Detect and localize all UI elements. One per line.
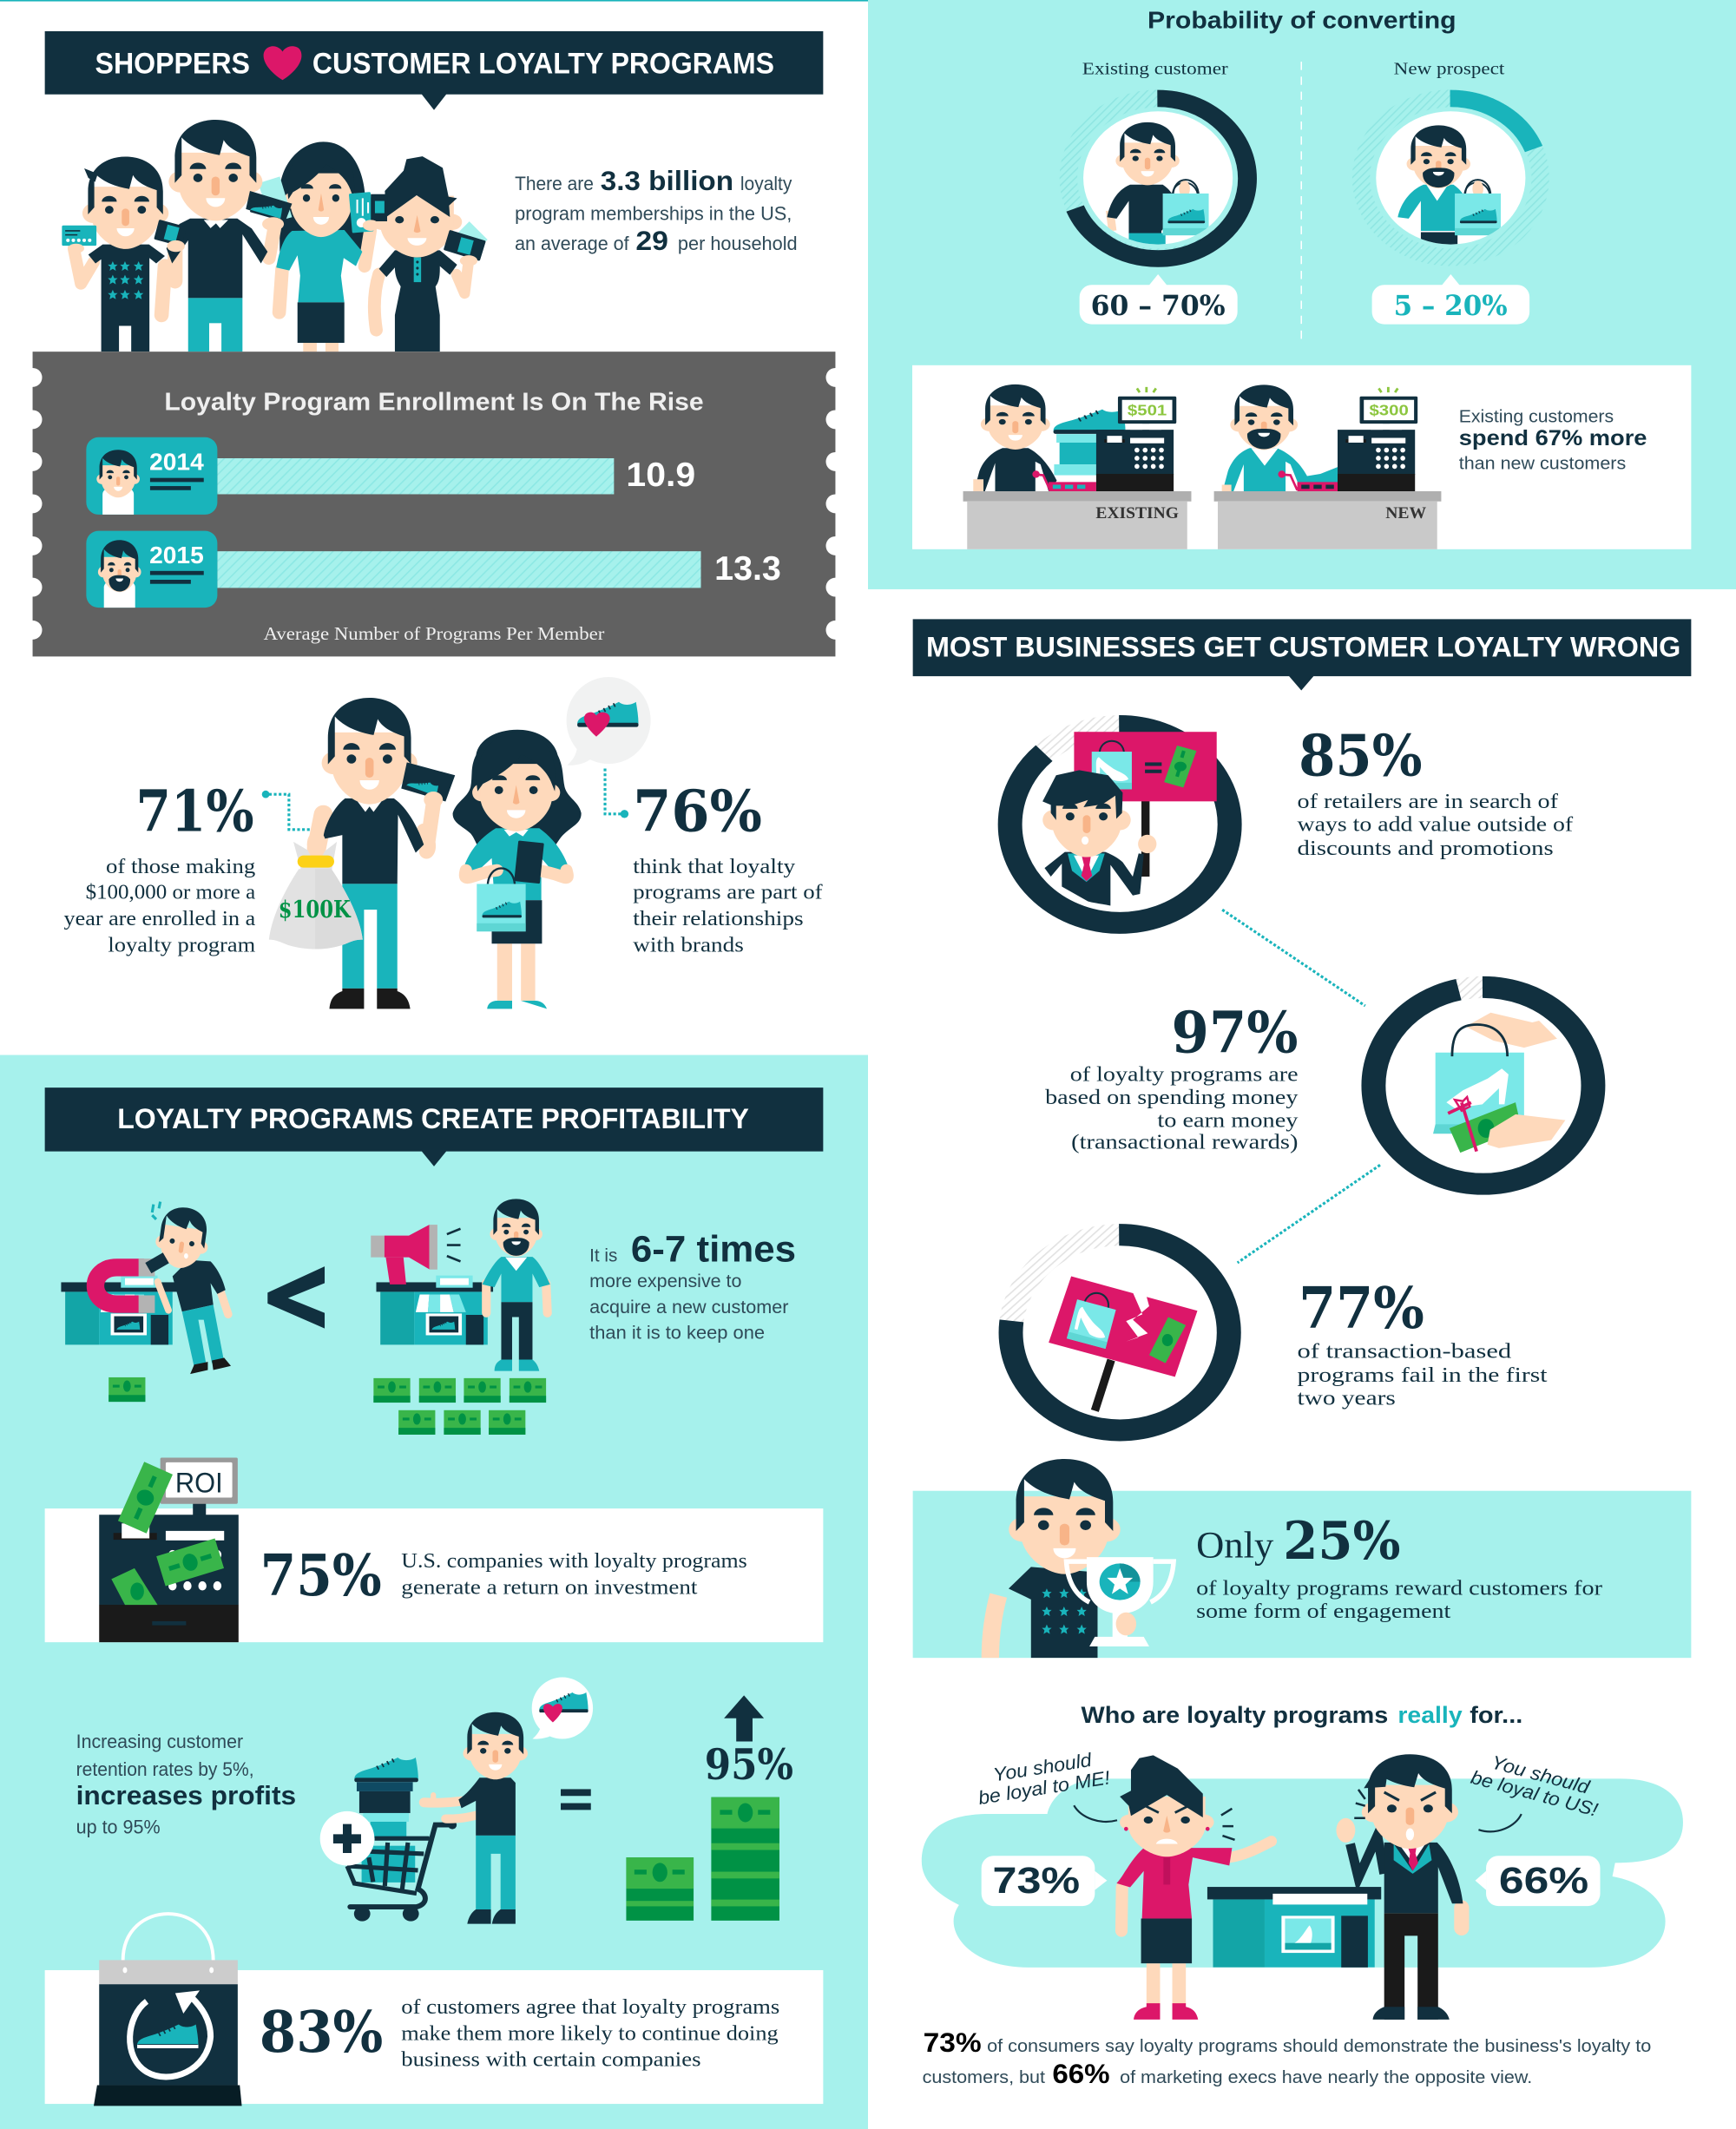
- quote: you should be loyal to us: You should: [1489, 1751, 1593, 1798]
- less than symbol: [267, 1266, 325, 1329]
- panel: only 25%: [913, 1459, 1691, 1658]
- prospect with bag: [1397, 125, 1501, 248]
- illustration: retention store with magnet: [61, 1202, 231, 1374]
- text: spend 67% more: [1459, 408, 1647, 474]
- stat: 77%: 77%: [1299, 1275, 1424, 1342]
- stat: 77%: [1298, 1275, 1548, 1409]
- top accent line: [0, 0, 868, 2]
- counter: new customer: NEW: [1385, 504, 1426, 522]
- bar: 2015: 13.3: [714, 550, 781, 588]
- chart: new prospect donut: New prospect: [1394, 59, 1505, 78]
- icon: money bag: [269, 831, 363, 950]
- text: 73% and 66% summary: 66%: [1052, 2059, 1110, 2089]
- text: 3.3 billion memberships: There are: [515, 173, 594, 194]
- bar: 2014: [86, 437, 695, 515]
- stat: 71%: of those making: [106, 855, 255, 878]
- quote: you should be loyal to me: [976, 1749, 1117, 1822]
- chart heading: Loyalty Program Enrollment Is On The Rise: [164, 388, 704, 416]
- chart: existing customer donut: [1069, 59, 1247, 325]
- stat: 97%: based on spending money: [1045, 1087, 1298, 1109]
- chart: 85% ring with sign: [1010, 726, 1230, 923]
- heading: loyalty programs create profitability: [45, 1087, 823, 1166]
- title banner: [45, 31, 823, 110]
- panel: 83% continue doing business: [45, 1914, 823, 2106]
- pill: 73%: 73%: [993, 1860, 1080, 1901]
- value pill: [1080, 274, 1238, 325]
- icon: money bag: $100K: [279, 896, 352, 923]
- icon: shopping bag with refresh arrow: [94, 1914, 242, 2106]
- icon: ROI cash register: [99, 1458, 239, 1642]
- stat: 71%: year are enrolled in a: [64, 907, 255, 930]
- value pill: 5 – 20%: [1394, 289, 1508, 322]
- one bill: cost to retain: [108, 1377, 145, 1402]
- hand: bottom: [1488, 1114, 1565, 1148]
- text: spend 67% more: Existing customers: [1459, 408, 1614, 427]
- chart: 77% ring with broken sign: [1011, 1235, 1229, 1430]
- panel: 75% ROI: generate a return on investment: [401, 1576, 698, 1600]
- heading: probability of converting: Probability of converting: [1147, 6, 1457, 33]
- text: 73% and 66% summary: 73%: [924, 2027, 982, 2058]
- text: 6-7 times: more expensive to: [589, 1271, 742, 1291]
- counter: new customer: [1214, 384, 1441, 549]
- chart: 97% ring with bag and hands: [1373, 987, 1593, 1184]
- panel: only 25%: Only: [1196, 1524, 1273, 1566]
- tall stack: [711, 1797, 779, 1921]
- text: 3.3 billion memberships: an average of: [515, 233, 629, 254]
- seven bills: cost to acquire: [373, 1378, 546, 1435]
- icon: ROI cash register: ROI: [175, 1466, 223, 1498]
- bar: 2015: 2015: [149, 542, 204, 568]
- heading: loyalty programs create profitability: LOYALTY PROGRAMS CREATE PROFITABILITY: [117, 1102, 749, 1134]
- heading: who are loyalty programs really for: really: [1397, 1702, 1463, 1728]
- connector: bubble to 76%: [605, 768, 628, 818]
- panel: probability background: [868, 0, 1736, 589]
- text: 73% and 66% summary: of marketing execs have nearly the opposite view.: [1120, 2067, 1532, 2087]
- woman in teal top: [276, 141, 387, 352]
- panel: 83% continue doing business: make them more likely to continue doing: [401, 2021, 779, 2045]
- text: spend 67% more: spend 67% more: [1459, 426, 1647, 450]
- customer with bag: [1107, 122, 1209, 249]
- text: spend 67% more: than new customers: [1459, 455, 1626, 474]
- panel: 83% continue doing business: 83%: [260, 1999, 383, 2066]
- man pushing cart: [424, 1712, 528, 1924]
- stat: 76%: their relationships: [633, 907, 804, 930]
- small stack: [626, 1857, 694, 1921]
- stat: 77%: two years: [1298, 1387, 1396, 1409]
- tall man with teal trousers: [167, 120, 292, 352]
- text: 3.3 billion memberships: 3.3 billion: [601, 166, 733, 196]
- icon: heart: [264, 46, 301, 80]
- text: 6-7 times: than it is to keep one: [589, 1323, 765, 1344]
- shopping cart pink: [1032, 470, 1096, 491]
- title banner: SHOPPERS: [95, 47, 250, 80]
- heading: most businesses get customer loyalty wrong: MOST BUSINESSES GET CUSTOMER LOYALTY WRONG: [926, 631, 1680, 662]
- stat: 85%: 85%: [1299, 722, 1422, 789]
- illustration: woman with shopping bag: [453, 677, 651, 1009]
- text: 3.3 billion memberships: loyalty: [740, 173, 792, 194]
- stat: 85%: [1298, 722, 1573, 860]
- woman: customer: [1116, 1755, 1272, 2020]
- stat: 97%: (transactional rewards): [1071, 1131, 1298, 1153]
- text: 3.3 billion memberships: [515, 166, 798, 256]
- illustration: shopper with cart: [320, 1678, 593, 1924]
- speech bubble: shoe and heart: [567, 677, 651, 766]
- shopping cart pink: [1278, 470, 1338, 491]
- value pill: 60 – 70%: [1091, 289, 1226, 322]
- quote: you should be loyal to us: [1469, 1751, 1601, 1831]
- stat: 76%: [633, 778, 824, 957]
- text: increases profits: retention rates by 5%,: [76, 1758, 254, 1780]
- panel: 83% continue doing business: of customers agree that loyalty programs: [401, 1995, 779, 2019]
- panel: 83% continue doing business: business with certain companies: [401, 2048, 701, 2072]
- text: increases profits: increases profits: [76, 1781, 296, 1810]
- stat: 71%: loyalty program: [108, 934, 255, 957]
- stat: 76%: programs are part of: [633, 881, 824, 904]
- shopping cart: [347, 1821, 457, 1922]
- stat: 97%: to earn money: [1157, 1109, 1299, 1132]
- icon: megaphone: [371, 1225, 461, 1285]
- panel: only 25%: 25%: [1283, 1511, 1400, 1572]
- illustration: man with money bag: [269, 698, 455, 1009]
- bar: 2015: [86, 531, 781, 608]
- text: 6-7 times: 6-7 times: [631, 1228, 796, 1269]
- woman with bun in navy dress: [0, 0, 488, 352]
- panel: existing vs new spend: [912, 365, 1691, 549]
- bar: 2014: 10.9: [626, 457, 695, 494]
- text: 3.3 billion memberships: per household: [678, 233, 798, 254]
- heading: who are loyalty programs really for: for...: [1470, 1702, 1522, 1728]
- chart: existing customer donut: Existing customer: [1082, 59, 1228, 78]
- connector: dotted 1: [1222, 910, 1365, 1006]
- text: 3.3 billion memberships: program memberships in the US,: [515, 202, 792, 224]
- customer holding card: [145, 1202, 231, 1374]
- quote: you should be loyal to us: be loyal to US!: [1469, 1766, 1601, 1821]
- plus badge: [320, 1811, 374, 1866]
- chart: new prospect donut: [1361, 59, 1541, 325]
- heading: who are loyalty programs really for: [1082, 1702, 1522, 1728]
- panel: 75% ROI: U.S. companies with loyalty programs: [401, 1549, 747, 1573]
- divider: dashed: [1300, 62, 1302, 339]
- counter: existing customer: EXISTING: [1095, 504, 1179, 522]
- businessman: [1042, 770, 1156, 905]
- stat: 85%: discounts and promotions: [1298, 838, 1554, 860]
- speech bubble: shoe and heart: [532, 1678, 593, 1739]
- connector: 71% to man: [262, 791, 312, 830]
- text: 73% and 66% summary: of consumers say loyalty programs should demonstrate the business's loyalty to: [987, 2036, 1651, 2056]
- text: increases profits: Increasing customer: [76, 1731, 243, 1752]
- panel: enrollment ticket chart: [23, 352, 845, 656]
- boy with star shirt: [62, 157, 187, 352]
- heading: who are loyalty programs really for: Who are loyalty programs: [1082, 1702, 1388, 1728]
- sign: bag equals money: [1074, 732, 1217, 877]
- panel: only 25%: some form of engagement: [1196, 1600, 1451, 1623]
- up arrow: [724, 1695, 764, 1742]
- stat: 97%: [1045, 999, 1299, 1153]
- text: 3.3 billion memberships: 29: [635, 226, 668, 256]
- stat: 77%: of transaction-based: [1298, 1340, 1511, 1363]
- pill: 66%: [1476, 1856, 1601, 1906]
- chart: money stacks with 95% rise: [626, 1695, 793, 1921]
- panel: 75% ROI: 75%: [260, 1542, 382, 1609]
- pill: 73%: [982, 1856, 1107, 1906]
- illustration: cloud background: [922, 1778, 1683, 1968]
- illustration: storefront: [1207, 1887, 1381, 1968]
- bill with ribbon: [1448, 1097, 1522, 1153]
- connector: dotted 2: [1238, 1165, 1380, 1263]
- panel: 75% ROI: [45, 1458, 823, 1642]
- shoe box stack: [354, 1758, 418, 1883]
- illustration: acquisition store with megaphone: [371, 1199, 550, 1371]
- counter: existing customer: $501: [1128, 402, 1167, 419]
- icon: magnet: [95, 1258, 155, 1313]
- bar: 2014: 2014: [149, 448, 205, 475]
- equals sign: [561, 1789, 591, 1810]
- stat: 71%: [64, 778, 255, 957]
- quote: you should be loyal to me: be loyal to ME!: [976, 1766, 1112, 1809]
- stat: 77%: programs fail in the first: [1298, 1364, 1548, 1387]
- panel: only 25%: of loyalty programs reward customers for: [1196, 1577, 1602, 1600]
- title banner: CUSTOMER LOYALTY PROGRAMS: [312, 47, 774, 80]
- illustration: four shoppers with loyalty cards: [0, 0, 488, 352]
- stat: 76%: think that loyalty: [633, 855, 796, 878]
- counter: new customer: $300: [1369, 402, 1409, 419]
- icon: gift bag: [1433, 1053, 1524, 1133]
- chart caption: Average Number of Programs Per Member: [264, 623, 604, 644]
- value pill: [1372, 274, 1529, 325]
- pill: 66%: 66%: [1499, 1860, 1588, 1901]
- text: increases profits: [76, 1731, 296, 1838]
- hand: top: [1466, 1013, 1557, 1048]
- quote: you should be loyal to me: You should: [991, 1749, 1094, 1785]
- counter: existing customer: [963, 384, 1191, 549]
- heading: most businesses get customer loyalty wrong: [913, 619, 1691, 691]
- text: 73% and 66% summary: customers, but: [923, 2067, 1045, 2087]
- stat: 71%: $100,000 or more a: [86, 881, 255, 904]
- text: 6-7 times: [589, 1228, 796, 1344]
- text: 73% and 66% summary: [923, 2027, 1651, 2089]
- stat: 85%: ways to add value outside of: [1298, 813, 1573, 836]
- text: 6-7 times: It is: [589, 1245, 617, 1265]
- stat: 76%: with brands: [633, 934, 744, 957]
- trophy: [1066, 1557, 1174, 1646]
- text: 6-7 times: acquire a new customer: [589, 1297, 788, 1317]
- stat: 97%: of loyalty programs are: [1070, 1063, 1299, 1086]
- stat: 76%: 76%: [633, 778, 762, 844]
- stat: 85%: of retailers are in search of: [1298, 791, 1558, 813]
- man with trophy: [990, 1459, 1174, 1658]
- customer with beard: [483, 1199, 550, 1371]
- text: increases profits: up to 95%: [76, 1817, 161, 1838]
- man: marketing exec: [1336, 1754, 1463, 2020]
- stat: 71%: 71%: [135, 778, 254, 844]
- chart: money stacks with 95% rise: 95%: [705, 1740, 793, 1790]
- stat: 97%: 97%: [1171, 999, 1298, 1066]
- panel: profitability background: [0, 1055, 868, 2129]
